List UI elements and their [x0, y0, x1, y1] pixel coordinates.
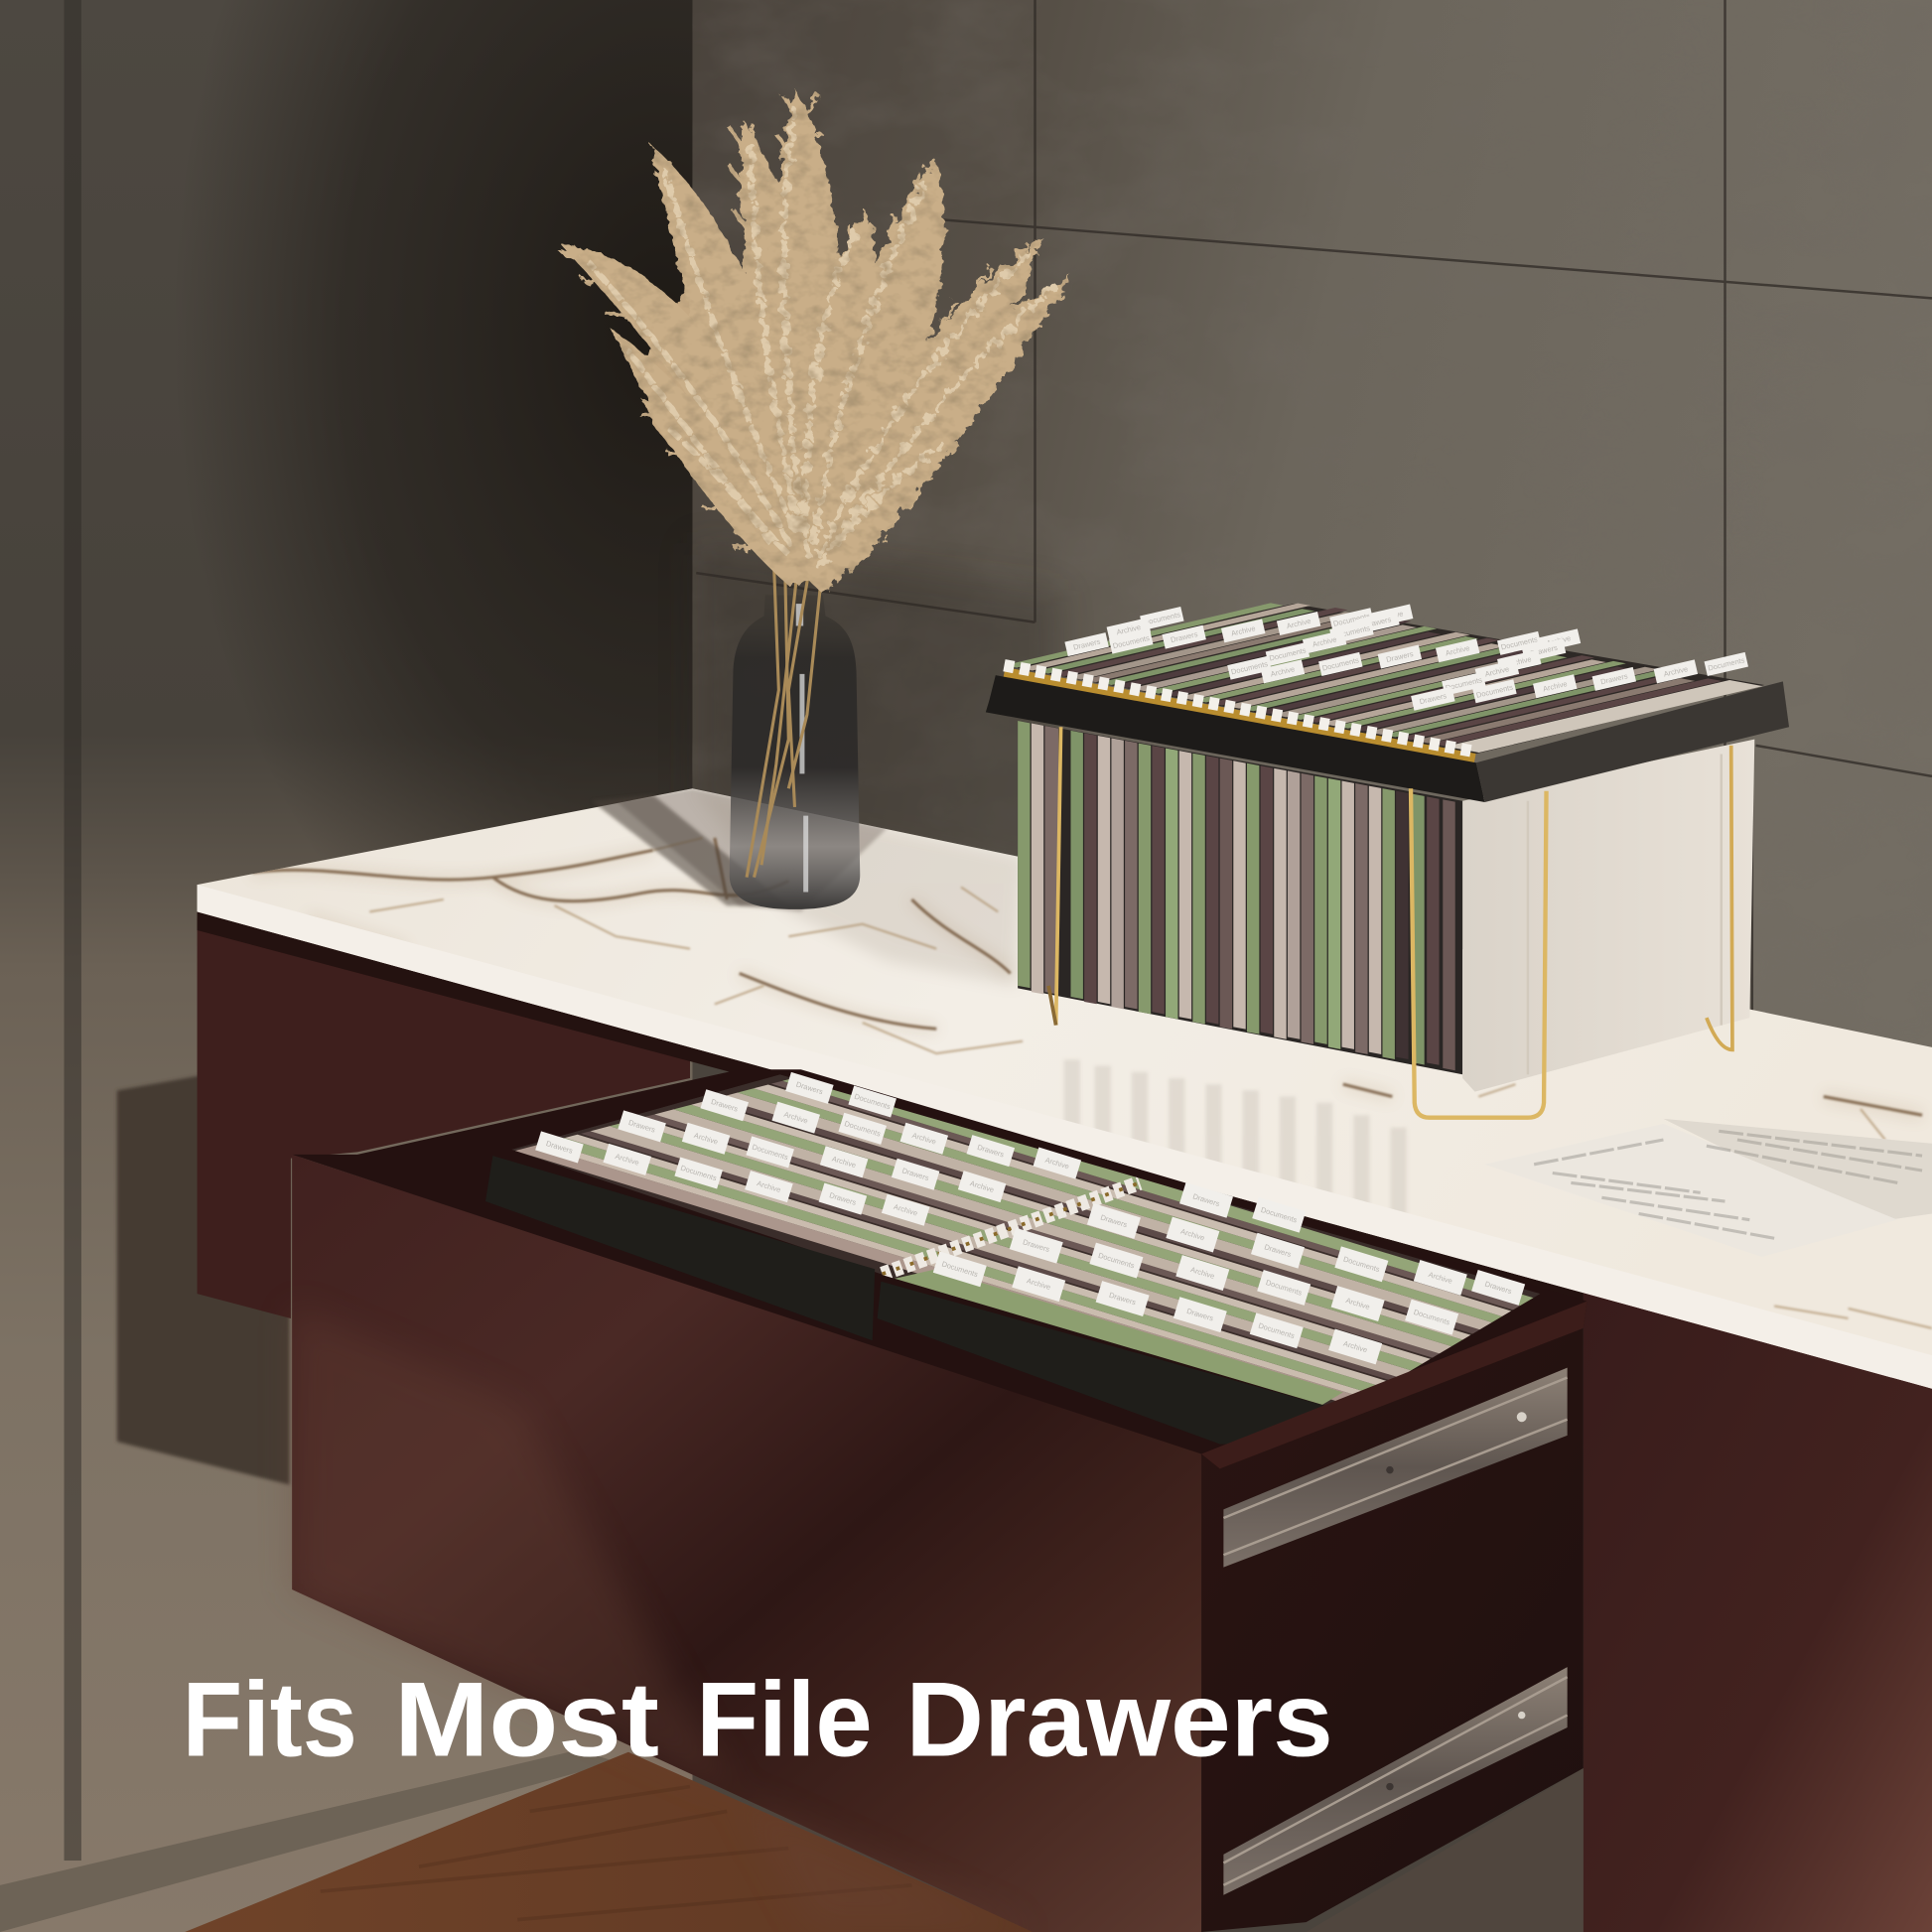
open drawer interior — [292, 1069, 1587, 1456]
drawer file tabs: Archive — [1428, 1270, 1453, 1286]
hanging file box: tabs: Drawers — [1599, 671, 1629, 686]
right closed drawer — [1584, 1282, 1932, 1932]
upper drawer slide rail — [1223, 1368, 1568, 1568]
title: File — [696, 1660, 873, 1779]
drawer front light sweep — [292, 1307, 1033, 1932]
drawer file tabs: Drawers — [976, 1143, 1006, 1160]
hanging file box: tabs: Archive — [1270, 664, 1296, 679]
drawer file tabs: Archive — [1344, 1296, 1371, 1311]
drawer file tabs: Drawers — [1099, 1213, 1129, 1229]
drawer file tabs: Documents — [1413, 1308, 1451, 1327]
drawer file tabs: Documents — [1097, 1251, 1136, 1270]
drawer file tabs: Drawers — [627, 1118, 656, 1135]
drawer side rim — [1201, 1302, 1587, 1468]
black hanging frame in drawer — [485, 1156, 1343, 1445]
marble underside shadow — [198, 911, 1584, 1320]
drawer file tabs: Drawers — [1191, 1191, 1221, 1208]
drawer file tabs: Drawers — [901, 1166, 930, 1182]
hanging file box: tabs: Drawers — [1072, 637, 1101, 652]
left closed drawer — [198, 918, 690, 1318]
hanging file box: tabs: Archive — [1506, 654, 1532, 669]
hanging file box: tabs — [1064, 605, 1748, 711]
hanging file box: folder tops — [1004, 599, 1764, 755]
open drawer front panel — [292, 1155, 1201, 1932]
drawer file tabs: Documents — [1342, 1255, 1381, 1274]
drawer file tabs: Drawers — [1108, 1291, 1137, 1308]
hanging file box: tabs: Archive — [1445, 643, 1470, 657]
drawer file tabs: Documents — [853, 1092, 892, 1111]
hanging file box: gold and white teeth rail — [1004, 665, 1475, 759]
hanging file box: tabs: Documents — [1143, 610, 1181, 627]
drawer file tabs: Documents — [679, 1164, 718, 1182]
hanging file box: black frame — [986, 675, 1789, 802]
drawer file tabs: Archive — [1189, 1265, 1215, 1281]
drawer file tabs: Documents — [843, 1119, 882, 1139]
open drawer side with interior — [1201, 1320, 1584, 1932]
hanging file box: tabs: Documents — [1230, 659, 1269, 676]
hanging file box: tabs: Archive — [1116, 622, 1142, 636]
hanging file box: tabs: Archive — [1484, 664, 1510, 679]
documents on countertop — [1484, 1119, 1932, 1257]
drawer file tabs: Archive — [969, 1178, 995, 1194]
floor: wood — [185, 1752, 1035, 1932]
drawer file tabs: Documents — [940, 1259, 979, 1279]
title: Fits — [183, 1660, 357, 1779]
drawer file tabs: Drawers — [710, 1097, 740, 1114]
drawer file tabs: Archive — [1342, 1339, 1368, 1354]
hanging file box: tabs: Documents — [1112, 633, 1151, 650]
drawer file tabs: Archive — [783, 1110, 809, 1126]
glass vase — [730, 595, 860, 909]
drawer file tabs: Archive — [1044, 1156, 1070, 1171]
title: Most — [394, 1660, 659, 1779]
drawer file tabs: Drawers — [828, 1190, 858, 1207]
hanging file box: tabs: Documents — [1332, 623, 1371, 640]
hanging file box: tabs: Archive — [1546, 633, 1572, 648]
drawer file tabs: Archive — [615, 1152, 640, 1168]
hanging file box: tabs: Documents — [1707, 655, 1745, 673]
hanging file box: tabs: Documents — [1269, 645, 1308, 663]
hanging file box: tabs: Drawers — [1385, 649, 1415, 664]
drawer file tabs: Drawers — [1263, 1242, 1293, 1259]
drawer file tabs — [535, 1072, 1525, 1364]
hanging file box: tabs: Archive — [1230, 623, 1256, 638]
drawer file tabs: Archive — [1026, 1276, 1051, 1292]
drawer file tabs: Archive — [893, 1202, 918, 1218]
wall seen below open drawer — [1307, 1768, 1584, 1932]
drawer file tabs: Drawers — [1022, 1237, 1051, 1254]
title: Drawers — [905, 1660, 1333, 1779]
drawer file tabs: Documents — [751, 1143, 789, 1162]
hanging files in drawer — [512, 1074, 1540, 1406]
hanging file box: tabs: Drawers — [1530, 643, 1559, 658]
background: concrete tile wall — [692, 0, 1932, 1059]
hanging file box: tabs: Archive — [1542, 679, 1568, 693]
marble countertop — [198, 788, 1932, 1389]
drawer file tabs: Archive — [911, 1131, 937, 1147]
drawer file tabs: Archive — [756, 1178, 782, 1194]
drawer file tabs: Documents — [1265, 1278, 1304, 1298]
drawer file tabs: Drawers — [795, 1079, 824, 1096]
hanging file box: tabs: Documents — [1445, 675, 1483, 692]
pampas stems — [747, 561, 823, 878]
hanging file box: tabs: Documents — [1475, 683, 1514, 700]
hanging file box: tabs: Documents — [1321, 655, 1360, 673]
vase shadow on marble — [592, 794, 788, 905]
hanging file box: gold wire legs — [1048, 727, 1732, 1118]
drawer file tabs: Archive — [831, 1154, 857, 1170]
hanging file box: tabs: Drawers — [1363, 615, 1392, 629]
hanging file box: tabs: Drawers — [1419, 691, 1448, 706]
drawer file tabs: Drawers — [1185, 1307, 1215, 1323]
hanging file box: tabs: Archive — [1378, 609, 1404, 623]
hanging file box: tabs: Documents — [1500, 634, 1539, 651]
drawer file tabs: Documents — [1257, 1321, 1296, 1340]
hanging file box: tabs: Archive — [1286, 617, 1311, 630]
hanging file box: tabs: Archive — [1663, 664, 1689, 679]
drawer file tabs: Documents — [1260, 1205, 1299, 1225]
drawer file tabs: Drawers — [1484, 1280, 1513, 1296]
hanging file box: tabs: Archive — [1311, 634, 1337, 649]
drawer file tabs: Drawers — [545, 1139, 574, 1156]
lower drawer slide rail — [1223, 1667, 1568, 1895]
hanging file box: cream side panel — [1462, 740, 1754, 1092]
drawer file tabs: Archive — [693, 1131, 719, 1147]
hanging file box: tabs: Documents — [1332, 612, 1371, 628]
hanging file box: tabs: Drawers — [1170, 629, 1198, 644]
background: left wall — [0, 0, 692, 1932]
pampas plumes — [561, 88, 1072, 594]
drawer file tabs: Archive — [1179, 1227, 1206, 1242]
hanging file box: back stripes — [1018, 721, 1462, 1074]
